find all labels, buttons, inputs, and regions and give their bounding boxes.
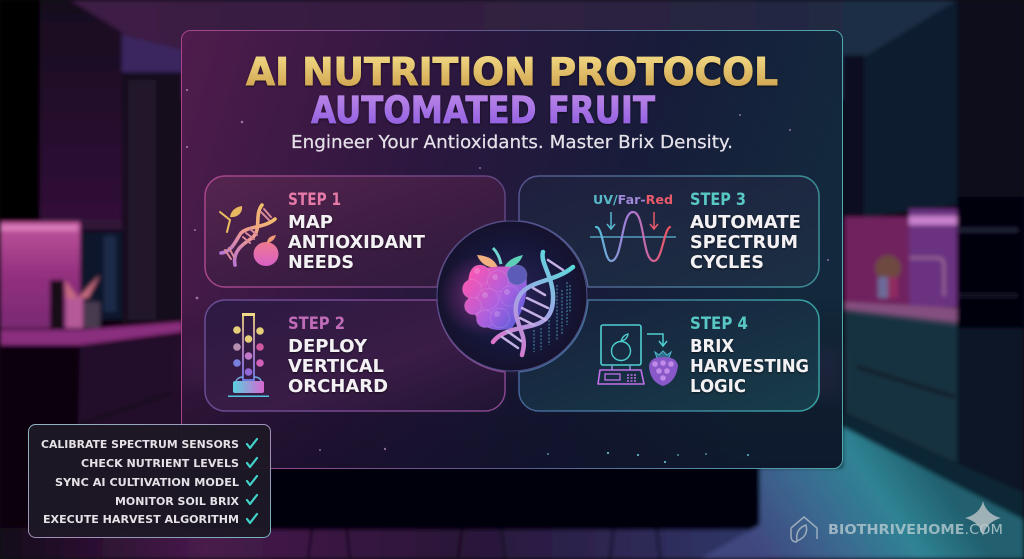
text: step 2 label: STEP 2: [288, 314, 345, 333]
text: step 4 title: [690, 336, 809, 397]
text: step 3 title: SPECTRUM: [690, 232, 798, 253]
text: step 1 title: [288, 212, 426, 273]
text: checklist items: SYNC AI CULTIVATION MODEL: [55, 476, 239, 489]
text: step 1 title: NEEDS: [288, 252, 354, 273]
text: step 1 title: ANTIOXIDANT: [288, 232, 426, 253]
panel: step 4: [519, 300, 819, 411]
checklist panel: [28, 424, 270, 538]
text: checklist items: [41, 438, 240, 526]
icon: vertical orchard tower: [228, 313, 269, 397]
icon: house and leaf: [791, 517, 817, 542]
icons: check marks: [247, 439, 257, 523]
icon: scale, apple and raspberry: [598, 325, 678, 386]
text: step 4 title: HARVESTING: [690, 356, 809, 377]
text: step 3 label: STEP 3: [690, 190, 746, 209]
icon: DNA and apple: [220, 205, 278, 266]
text: step 1 label: STEP 1: [288, 190, 341, 209]
text: step 4 title: LOGIC: [690, 376, 746, 397]
icon: DNA helix: [493, 252, 573, 355]
text: step 2 title: DEPLOY: [288, 336, 368, 357]
icon: UV and far-red light wave: [590, 193, 676, 261]
text: step 3 title: [690, 212, 801, 273]
text: checklist items: CHECK NUTRIENT LEVELS: [81, 457, 239, 470]
heading: Automated Fruit: AUTOMATED FRUIT: [311, 89, 656, 132]
subtitle: Engineer Your Antioxidants. Master Brix Density.: [291, 133, 733, 153]
text: checklist items: EXECUTE HARVEST ALGORITHM: [43, 513, 239, 526]
right side: [843, 0, 957, 57]
text: step 3 title: CYCLES: [690, 252, 764, 273]
central hub: raspberry and DNA: [437, 221, 587, 371]
text: step 2 title: ORCHARD: [288, 376, 388, 397]
text: site name: BIOTHRIVEHOME .COM: [828, 523, 1003, 538]
text: step 4 title: BRIX: [690, 336, 734, 357]
icon: raspberry: [462, 248, 527, 330]
watermark: BioThriveHome logo: [791, 501, 1003, 542]
text: checklist items: CALIBRATE SPECTRUM SENSORS: [41, 438, 239, 451]
text: checklist items: MONITOR SOIL BRIX: [115, 495, 240, 508]
text: step 2 title: [288, 336, 388, 397]
decoration: data streams: [534, 282, 570, 352]
heading: AI Nutrition Protocol: AI NUTRITION PROTOCOL: [246, 50, 778, 95]
text: step 3 title: AUTOMATE: [690, 212, 801, 233]
main glass panel: [182, 30, 842, 468]
text: step 1 title: MAP: [288, 212, 333, 233]
text: step 4 label: STEP 4: [690, 314, 748, 333]
icon: UV and far-red light wave: UV/Far-Red: [593, 193, 673, 207]
panel: step 1: [205, 176, 505, 287]
icon: sparkle: [965, 501, 1001, 536]
panel: step 3: [519, 176, 819, 287]
panel: step 2: [205, 300, 505, 411]
text: step 2 title: VERTICAL: [288, 356, 384, 377]
